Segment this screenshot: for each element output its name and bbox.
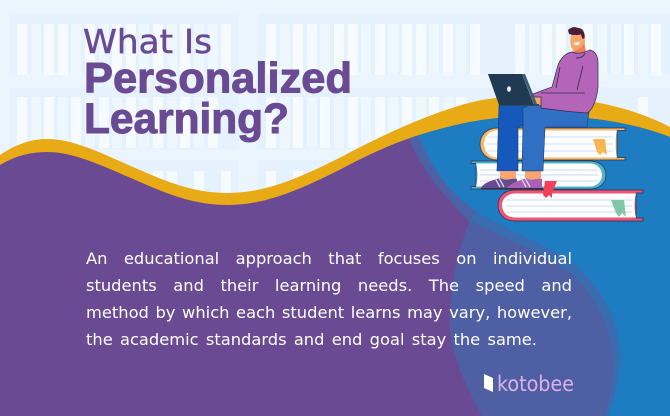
body text: An educational approach that focuses on individual bbox=[86, 249, 572, 268]
overlay edge band bbox=[470, 211, 620, 416]
person: sweater bbox=[533, 50, 598, 113]
person: hand bbox=[532, 97, 541, 104]
gold wave bbox=[0, 96, 670, 416]
person: near leg bbox=[522, 105, 589, 171]
title: Personalized bbox=[84, 56, 352, 102]
title bbox=[83, 22, 352, 143]
book: middle bbox=[471, 161, 606, 189]
blue fill bbox=[404, 100, 670, 416]
translucent overlay shape bbox=[450, 220, 613, 416]
shoe stripes bbox=[495, 178, 530, 187]
person: skin ankles bbox=[500, 171, 541, 179]
title: What Is bbox=[83, 22, 212, 61]
bookmark: green bbox=[611, 200, 626, 217]
bookmark: orange bbox=[593, 139, 607, 155]
illustration: books and person bbox=[471, 27, 643, 221]
bookmark: red bbox=[543, 181, 557, 198]
logo icon bbox=[484, 374, 493, 392]
person: hair bbox=[568, 27, 585, 39]
person: shoe far bbox=[481, 178, 517, 189]
person: neck and face bbox=[570, 34, 587, 55]
person: laptop bbox=[488, 74, 539, 106]
body text: students and their learning needs. The speed and bbox=[86, 276, 572, 295]
body text: method by which each student learns may vary, however, bbox=[86, 303, 572, 322]
person: far leg bbox=[497, 105, 530, 171]
blue area bbox=[404, 100, 670, 416]
logo bbox=[484, 372, 574, 396]
title: Learning? bbox=[84, 96, 289, 143]
book: bottom bbox=[498, 181, 643, 221]
person: shoe near bbox=[507, 178, 542, 188]
book: top bbox=[480, 128, 625, 160]
lighter band bbox=[409, 135, 476, 222]
body text bbox=[86, 249, 572, 349]
purple wave bbox=[0, 116, 670, 416]
logo text: kotobee bbox=[497, 372, 574, 396]
body text: the academic standards and end goal stay the same. bbox=[86, 330, 537, 349]
